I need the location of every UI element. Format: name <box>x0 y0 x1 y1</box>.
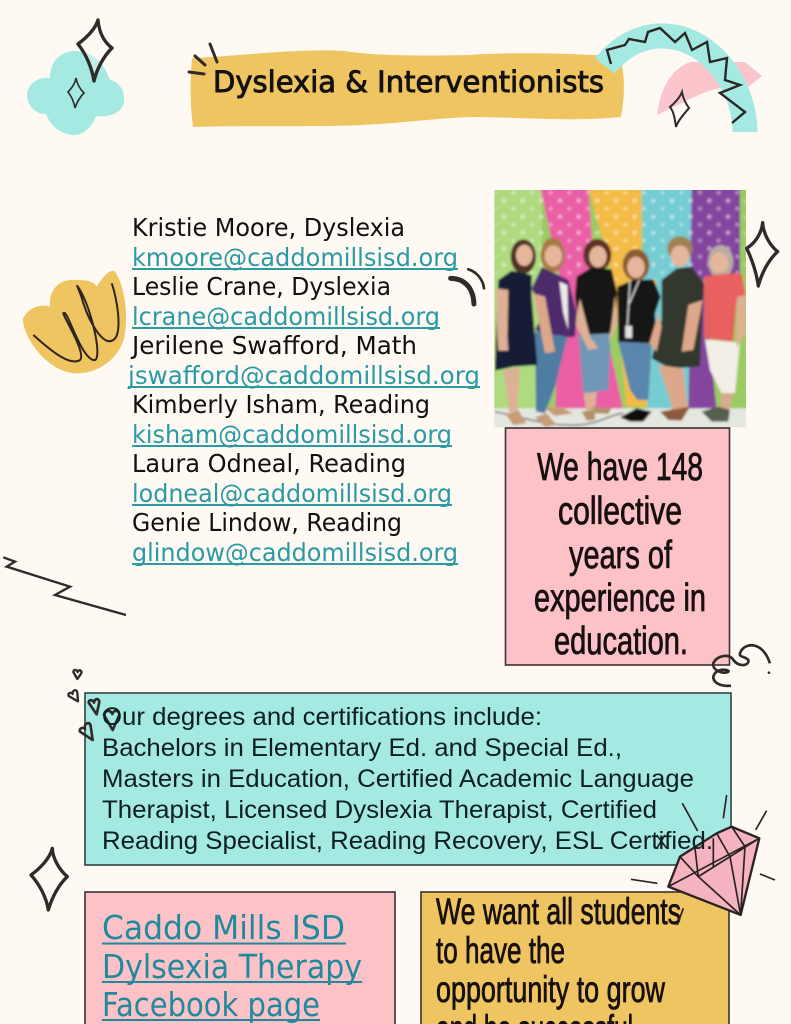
staff contact: Jerilene Swafford: jswafford@caddomillsisd.org <box>127 361 480 390</box>
staff contact: Jerilene Swafford: Jerilene Swafford, Math <box>130 331 417 360</box>
floor <box>490 408 750 430</box>
staff contact: Kimberly Isham: Kimberly Isham, Reading <box>132 390 430 419</box>
staff contact: Leslie Crane: Leslie Crane, Dyslexia <box>132 272 391 301</box>
curtains <box>540 190 746 410</box>
mission text <box>436 891 681 1024</box>
degrees and certifications text: Bachelors in Elementary Ed. and Special Ed., <box>102 734 622 762</box>
mission text: to have the <box>436 930 565 971</box>
person 4 <box>617 249 662 422</box>
panel: Facebook link <box>85 892 395 1024</box>
panel: degrees and certifications <box>85 693 731 865</box>
staff contact: Laura Odneal <box>132 449 452 508</box>
Facebook link text: Caddo Mills ISD <box>102 908 345 947</box>
icon: teal cloud with sparkles <box>27 20 124 135</box>
icon: teal arch with zigzag and pink shape <box>605 28 762 132</box>
icon: zigzag line <box>3 557 126 615</box>
staff contact: Genie Lindow: glindow@caddomillsisd.org <box>132 538 458 567</box>
person 5 <box>652 236 704 421</box>
experience text: collective <box>558 490 682 533</box>
experience text: years of <box>569 534 672 577</box>
Facebook link text <box>102 908 362 1024</box>
staff contact: Kristie Moore: Kristie Moore, Dyslexia <box>132 213 405 242</box>
icon: yellow scribble flower <box>23 271 126 373</box>
staff contact: Kimberly Isham: kisham@caddomillsisd.org <box>132 420 452 449</box>
experience text: education. <box>554 620 688 663</box>
title banner <box>191 50 624 127</box>
panel: mission statement <box>421 891 729 1024</box>
staff contact: Jerilene Swafford <box>127 331 480 390</box>
person 2 <box>532 238 577 427</box>
icon: curved marks <box>451 269 484 304</box>
icon: hearts <box>68 670 119 740</box>
degrees and certifications text: Therapist, Licensed Dyslexia Therapist, Certified <box>102 796 657 824</box>
title text: Dyslexia & Interventionists <box>213 65 604 99</box>
mission text: opportunity to grow <box>436 969 665 1010</box>
contact list <box>127 213 480 567</box>
degrees and certifications text: Reading Specialist, Reading Recovery, ESL Certified. <box>102 827 713 855</box>
mission text: We want all students <box>436 891 681 932</box>
staff contact: Laura Odneal: Laura Odneal, Reading <box>132 449 406 478</box>
staff contact: Genie Lindow: Genie Lindow, Reading <box>132 508 402 537</box>
person 1 <box>495 239 537 425</box>
icon: pink diamond <box>631 795 775 925</box>
staff contact: Kristie Moore: kmoore@caddomillsisd.org <box>132 243 458 272</box>
icon: swirl <box>713 645 770 686</box>
staff contact: Kimberly Isham <box>132 390 452 449</box>
icon: sparkle right of photo <box>747 223 778 286</box>
degrees and certifications text: Our degrees and certifications include: <box>102 703 542 731</box>
panel: experience callout <box>506 428 730 665</box>
staff group photo <box>490 187 750 430</box>
degrees and certifications text: Masters in Education, Certified Academic Language <box>102 765 694 793</box>
degrees and certifications text <box>102 703 713 855</box>
Facebook link text: Facebook page <box>102 985 320 1024</box>
staff contact: Laura Odneal: lodneal@caddomillsisd.org <box>132 479 452 508</box>
icon: sparkle left <box>31 848 67 910</box>
experience text <box>534 446 706 663</box>
Facebook link text: Dylsexia Therapy <box>102 947 362 986</box>
staff contact: Leslie Crane <box>132 272 440 331</box>
staff contact: Genie Lindow <box>132 508 458 567</box>
person 3 <box>575 239 617 421</box>
staff contact: Leslie Crane: lcrane@caddomillsisd.org <box>132 302 440 331</box>
person 6 <box>702 245 746 422</box>
staff contact: Kristie Moore <box>132 213 458 272</box>
icon: title accent ticks <box>189 44 217 74</box>
experience text: experience in <box>534 577 706 620</box>
experience text: We have 148 <box>537 446 703 489</box>
